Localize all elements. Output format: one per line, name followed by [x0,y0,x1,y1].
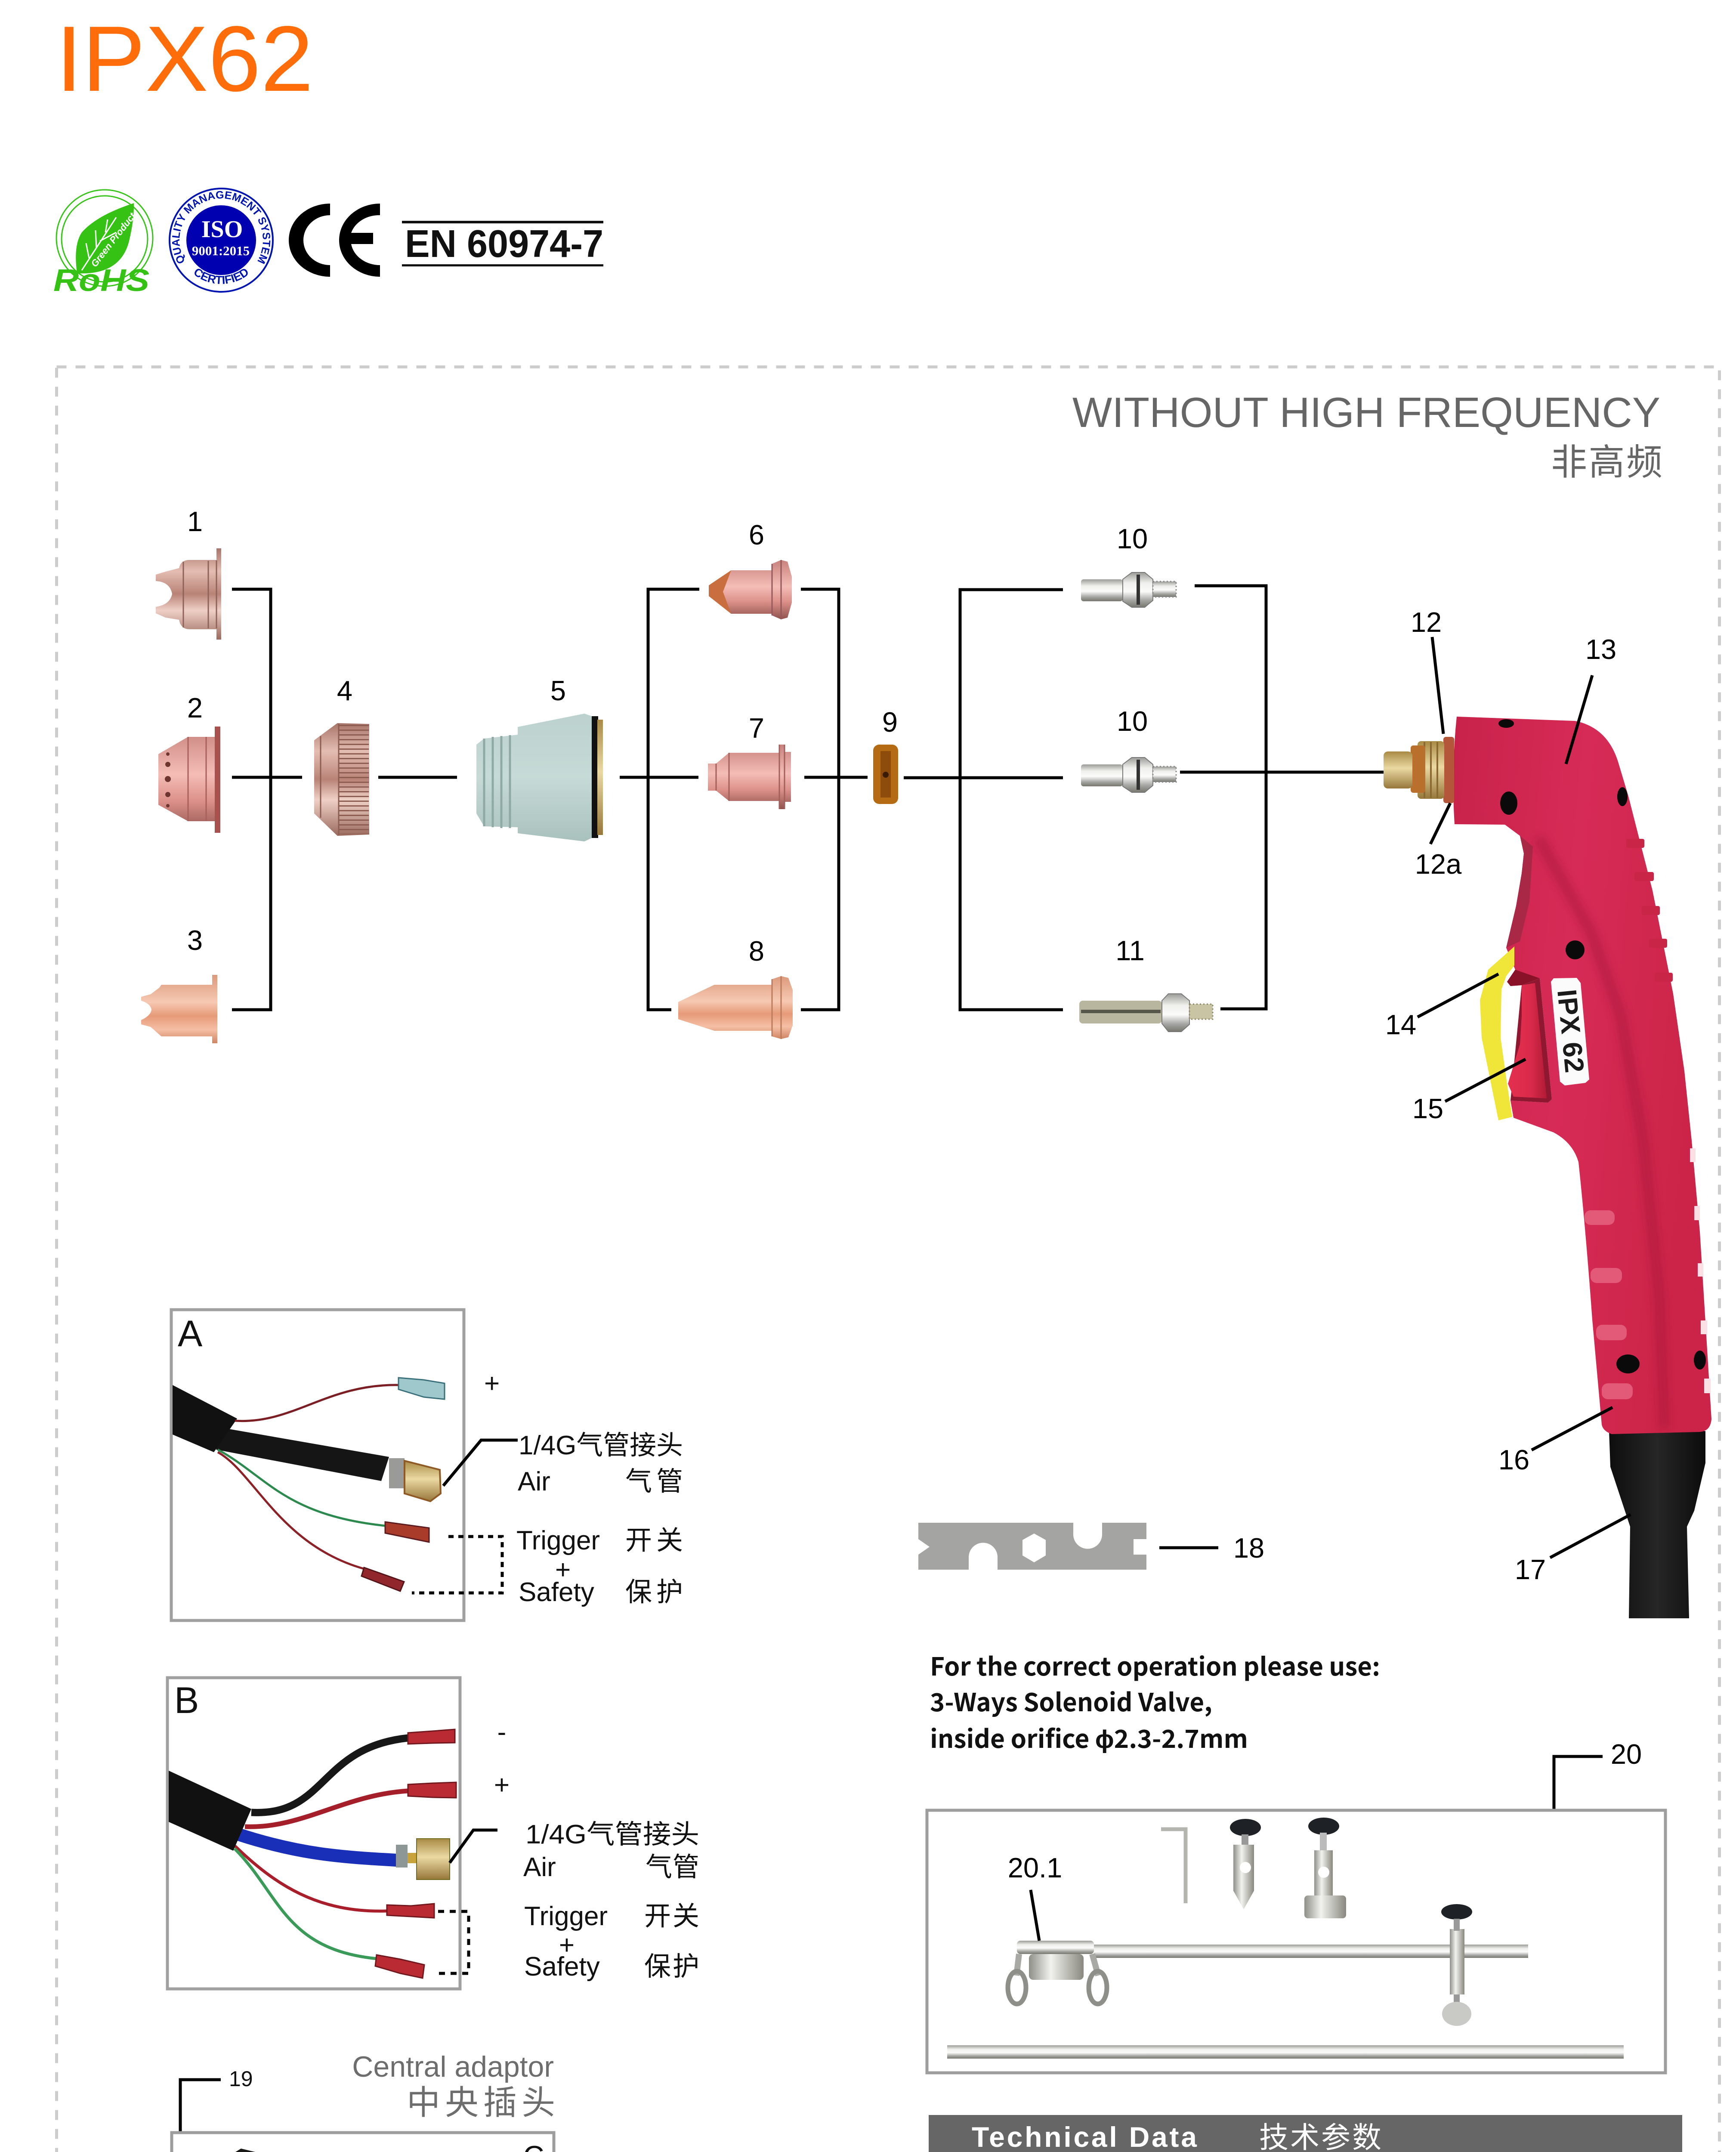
panel B: wire harness [167,1678,460,1989]
icon: ISO 9001 seal: 9001:2015 [192,243,250,258]
torch holes [1498,719,1706,1373]
icon: EN 60974-7 standard: EN 60974-7 [405,223,603,266]
callouts: torch part numbers: 13 [1585,634,1616,665]
part 7: nozzle: 7 [749,712,764,744]
icon: roller guide [1008,1941,1107,2004]
icon: guide arm [1094,1904,1528,2026]
torch grip slots [1585,1210,1633,1399]
labels: panel B wiring: Safety [524,1952,600,1982]
panel: connector C/D [172,2133,554,2152]
part 4: retaining cap [314,675,369,836]
part 7: nozzle [708,712,791,809]
callout: part 20 [1554,1738,1642,1809]
part 18: spanner: 18 [1233,1532,1264,1564]
text block: operation note: 3-Ways Solenoid Valve, [930,1682,1212,1719]
labels: panel A wiring: + [484,1369,500,1398]
part 18: spanner [918,1523,1264,1570]
part 3: drag shield [141,924,217,1043]
callouts: torch part numbers: 17 [1515,1554,1546,1585]
heading: central adaptor: 中央插头 [407,2084,555,2121]
icon: RoHS leaf logo: RoHS [53,263,149,298]
labels: panel B wiring: Air [523,1852,556,1882]
part 3: drag shield: 3 [187,924,203,956]
torch cable sleeve [1609,1431,1705,1618]
heading: without high frequency: WITHOUT HIGH FREQUENCY [1072,389,1660,436]
panel A: wire harness: A [178,1313,203,1354]
part 11: long electrode: 11 [1115,935,1145,966]
text block: operation note [930,1647,1380,1755]
panel B: wire harness: B [174,1680,199,1721]
labels: panel A wiring: + [555,1555,571,1585]
labels: panel B wiring: 保护 [644,1952,699,1982]
labels: panel A wiring: Trigger [516,1526,600,1555]
heading: without high frequency: 非高频 [1551,442,1662,482]
part 6: nozzle [709,519,792,619]
torch model label: IPX 62 [1551,988,1590,1074]
labels: panel B wiring: + [494,1770,510,1800]
icon: ISO 9001 seal: ISO [201,216,243,243]
panel: dashed frame [57,367,1720,2152]
torch safety guard [1480,946,1514,1120]
callouts: torch part numbers: 12a [1415,848,1462,880]
panel: circle cutting guide kit [927,1810,1665,2073]
callouts: torch part numbers: 14 [1385,1009,1416,1040]
labels: panel A wiring: Safety [519,1577,594,1607]
icon: ISO 9001 seal: CERTIFIED [192,265,251,287]
callout: part 19 [180,2067,253,2131]
torch handle body [1453,717,1711,1434]
part 5: insulator body: 5 [550,675,566,706]
icon: RoHS leaf logo: Green Product [89,210,138,269]
labels: panel B wiring: 气管 [646,1852,699,1882]
label: 20.1: 20.1 [1008,1852,1062,1883]
labels: panel A wiring: 1/4G气管接头 [519,1431,683,1460]
table header [929,2115,1682,2152]
text block: operation note: inside orifice ϕ2.3-2.7mm [930,1719,1248,1755]
labels: panel B wiring: - [497,1717,506,1747]
callouts: torch part numbers [1385,606,1631,1585]
icon: CE mark [289,204,380,277]
heading: without high frequency [1072,389,1662,482]
labels: panel A wiring: 气管 [625,1467,683,1497]
part 11: long electrode [1079,935,1213,1032]
labels: panel B wiring [435,1717,699,1982]
icon: RoHS leaf logo [53,190,153,298]
icon: ISO 9001 seal: QUALITY MANAGEMENT SYSTEM [170,189,272,266]
part 8: nozzle: 8 [749,935,764,967]
part 1: shield cap [156,506,221,640]
diagram: connector lines between parts [232,586,1402,1010]
illustration: plasma torch [1384,717,1711,1618]
part 2: shield: 2 [187,692,203,724]
part 10: electrode [1081,523,1176,607]
part 6: nozzle: 6 [749,519,764,550]
callouts: torch part numbers: 16 [1498,1444,1529,1475]
labels: panel A wiring: 开关 [625,1526,683,1555]
labels: panel B wiring: 开关 [644,1902,699,1931]
icon: long rod [947,2045,1624,2059]
heading: central adaptor: Central adaptor [352,2050,554,2083]
text block: operation note: For the correct operation please use: [930,1647,1380,1683]
callout: part 20: 20 [1611,1738,1642,1770]
table header: Technical Data [972,2121,1197,2152]
callout: part 19: 19 [229,2067,253,2091]
panel A: wire harness [171,1310,464,1620]
part 10: electrode: 10 [1117,523,1148,554]
part 8: nozzle [678,935,793,1039]
torch edge notches [1690,1148,1711,1393]
part 1: shield cap: 1 [187,506,203,537]
torch head fitting [1384,737,1454,803]
labels: panel A wiring: Air [518,1467,550,1497]
panel: technical data table [929,2115,1682,2152]
labels: panel A wiring [412,1369,683,1607]
part 4: retaining cap: 4 [337,675,352,706]
icon: pointed pin with knob [1230,1819,1261,1909]
labels: panel A wiring: 保护 [625,1577,683,1607]
labels: panel B wiring: + [559,1930,575,1960]
callouts: torch part numbers: 12 [1411,606,1442,638]
part 10: electrode alternate: 10 [1117,705,1148,737]
label: 20.1 [1008,1852,1062,1941]
callouts: torch part numbers: 15 [1412,1093,1443,1124]
icon: pin with collar and knob [1304,1818,1346,1918]
torch ribs [1626,839,1673,982]
part 5: insulator body [476,675,603,841]
part 2: shield [158,692,220,833]
icon: hex key [1161,1829,1186,1903]
part 10: electrode alternate [1081,705,1176,792]
part 9: swirl ring [873,706,898,804]
torch trigger [1508,978,1552,1103]
part 9: swirl ring: 9 [882,706,898,738]
title: IPX62 [56,6,313,111]
labels: panel B wiring: 1/4G气管接头 [525,1820,699,1849]
heading: central adaptor [352,2050,555,2121]
labels: panel B wiring: Trigger [524,1902,608,1931]
